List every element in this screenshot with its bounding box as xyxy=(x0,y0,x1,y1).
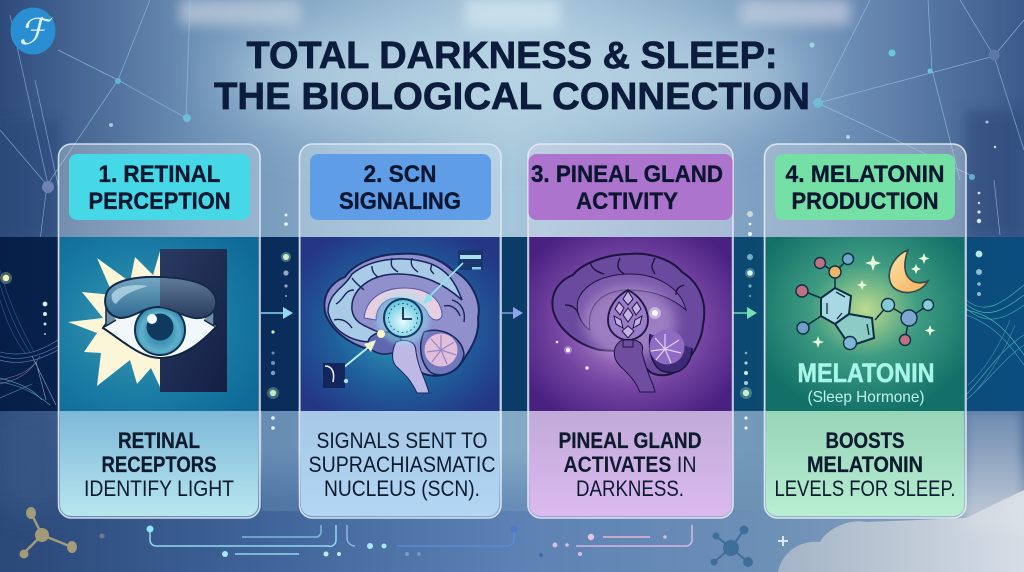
heading: melatonin production: 4. MELATONIN xyxy=(786,161,944,188)
text: retinal receptors: IDENTIFY LIGHT xyxy=(84,476,234,501)
text: retinal receptors: RETINAL xyxy=(118,428,200,453)
cloud bottom right xyxy=(778,490,1024,572)
heading: melatonin production: PRODUCTION xyxy=(792,188,938,215)
molecule bottom left xyxy=(20,507,77,558)
network lines top right xyxy=(810,0,1024,235)
text: retinal receptors xyxy=(84,428,234,501)
arrow 3 to 4 xyxy=(733,307,757,319)
heading: pineal gland activity: 3. PINEAL GLAND xyxy=(531,161,723,188)
panel: pineal gland activity xyxy=(528,144,733,518)
text: pineal gland activates: DARKNESS. xyxy=(576,476,684,501)
heading: retinal perception: 1. RETINAL xyxy=(98,161,221,188)
icon: melatonin molecule and moon xyxy=(796,250,936,350)
panel: scn signaling xyxy=(300,144,501,518)
wave left xyxy=(0,270,58,405)
label: melatonin sleep hormone: MELATONIN xyxy=(798,358,934,388)
panel: melatonin production xyxy=(764,144,966,518)
logo badge xyxy=(10,8,56,54)
heading: retinal perception: PERCEPTION xyxy=(88,188,230,215)
text: pineal gland activates xyxy=(558,428,702,501)
title: TOTAL DARKNESS & SLEEP: xyxy=(246,35,778,77)
icon: brain with clock xyxy=(323,250,483,393)
heading: pineal gland activity xyxy=(528,154,732,220)
circuit lines bottom xyxy=(100,525,788,557)
text: boosts melatonin xyxy=(774,428,956,501)
panel: retinal perception xyxy=(58,144,260,518)
connector dots xyxy=(0,146,996,430)
heading: scn signaling: 2. SCN xyxy=(364,161,436,188)
text: pineal gland activates: ACTIVATES IN xyxy=(564,452,696,477)
text: signals sent to scn: NUCLEUS (SCN). xyxy=(324,476,480,501)
text: boosts melatonin: BOOSTS xyxy=(826,428,904,453)
title xyxy=(214,35,810,118)
text: boosts melatonin: LEVELS FOR SLEEP. xyxy=(774,476,956,501)
text: signals sent to scn xyxy=(308,428,496,501)
icon: brain with pineal gland xyxy=(552,254,704,392)
heading: melatonin production xyxy=(775,154,955,220)
heading: retinal perception xyxy=(69,154,250,220)
text: retinal receptors: RECEPTORS xyxy=(102,452,216,477)
wave right xyxy=(966,285,1024,400)
label: melatonin sleep hormone xyxy=(798,358,934,406)
heading: scn signaling xyxy=(310,154,491,220)
text: pineal gland activates: PINEAL GLAND xyxy=(558,428,702,453)
heading: pineal gland activity: ACTIVITY xyxy=(576,188,678,215)
arrow 2 to 3 xyxy=(502,307,523,319)
logo badge: ℱ xyxy=(19,12,53,53)
text: signals sent to scn: SIGNALS SENT TO xyxy=(316,428,488,453)
arrow 1 to 2 xyxy=(261,307,293,319)
dark horizontal band xyxy=(0,237,1024,411)
icon: masked eye with light burst xyxy=(68,249,227,392)
heading: scn signaling: SIGNALING xyxy=(339,188,461,215)
label: melatonin sleep hormone: (Sleep Hormone) xyxy=(808,389,924,406)
text: signals sent to scn: SUPRACHIASMATIC xyxy=(308,452,496,477)
title: THE BIOLOGICAL CONNECTION xyxy=(214,76,810,118)
molecule bottom right xyxy=(710,526,753,567)
text: boosts melatonin: MELATONIN xyxy=(807,452,923,477)
network lines top left xyxy=(0,0,191,280)
